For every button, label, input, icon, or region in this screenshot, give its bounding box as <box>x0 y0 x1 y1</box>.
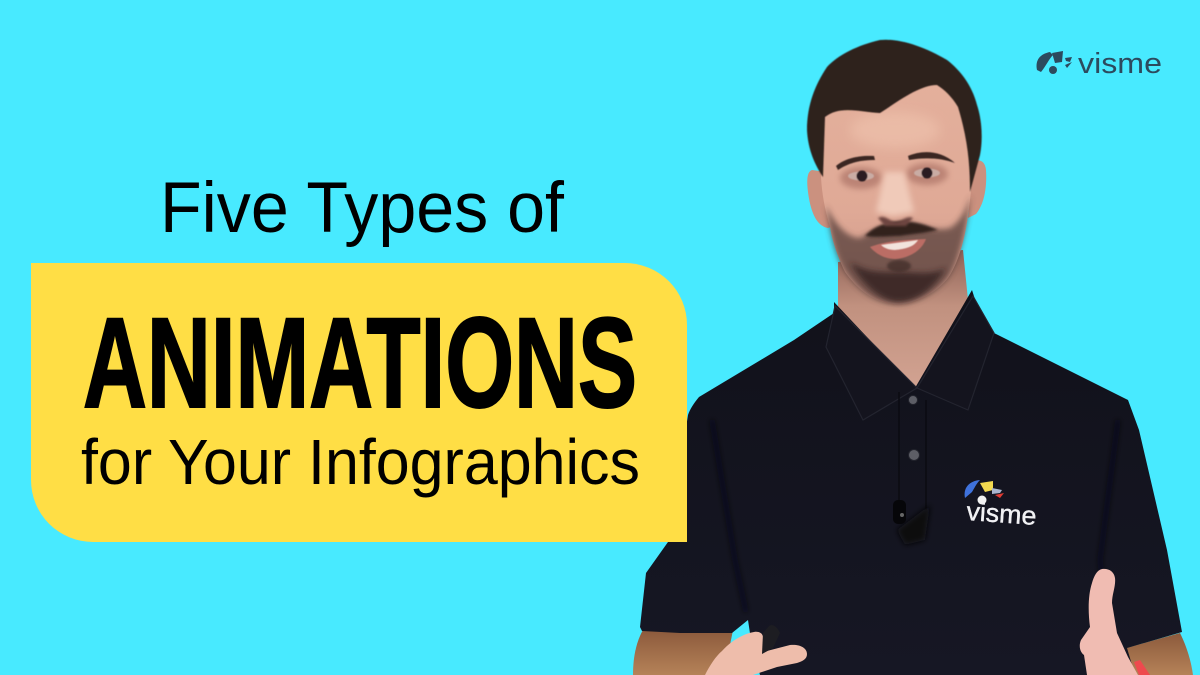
shirt logo <box>965 480 1038 531</box>
logo icon <box>1037 51 1072 74</box>
right arm <box>1126 633 1193 675</box>
eye shadows <box>840 163 948 189</box>
hair <box>807 40 982 192</box>
left arm <box>633 630 733 675</box>
mouth <box>870 239 926 259</box>
presenter <box>633 40 1193 675</box>
shirt fold <box>897 505 930 545</box>
soul patch <box>887 260 911 272</box>
eyes <box>848 168 940 182</box>
lapel mic <box>893 500 906 524</box>
chin beard <box>850 262 946 302</box>
forehead highlight <box>850 112 940 148</box>
face <box>820 75 972 304</box>
title line: for Your Infographics: for Your Infographics <box>81 426 640 498</box>
ears <box>807 160 986 228</box>
yellow title panel <box>31 263 687 542</box>
collar <box>826 296 994 420</box>
logo mark <box>965 480 1004 504</box>
title line: ANIMATIONS: ANIMATIONS <box>83 292 637 435</box>
mustache <box>865 221 938 237</box>
beard <box>826 195 971 304</box>
eyebrows <box>836 152 955 170</box>
neck <box>838 250 968 390</box>
polo shirt <box>640 290 1182 675</box>
title line: Five Types of: Five Types of <box>160 169 564 248</box>
left hand with remote <box>705 625 807 675</box>
red wristband <box>1134 660 1150 675</box>
nose <box>876 172 914 226</box>
logo wordmark: visme <box>966 496 1038 531</box>
logo wordmark: visme <box>1078 48 1162 80</box>
buttons <box>908 396 920 460</box>
remote <box>762 625 780 654</box>
sleeve seams <box>712 420 1118 630</box>
placket <box>899 392 926 510</box>
visme logo top right <box>1037 48 1162 80</box>
right hand <box>1080 569 1138 675</box>
